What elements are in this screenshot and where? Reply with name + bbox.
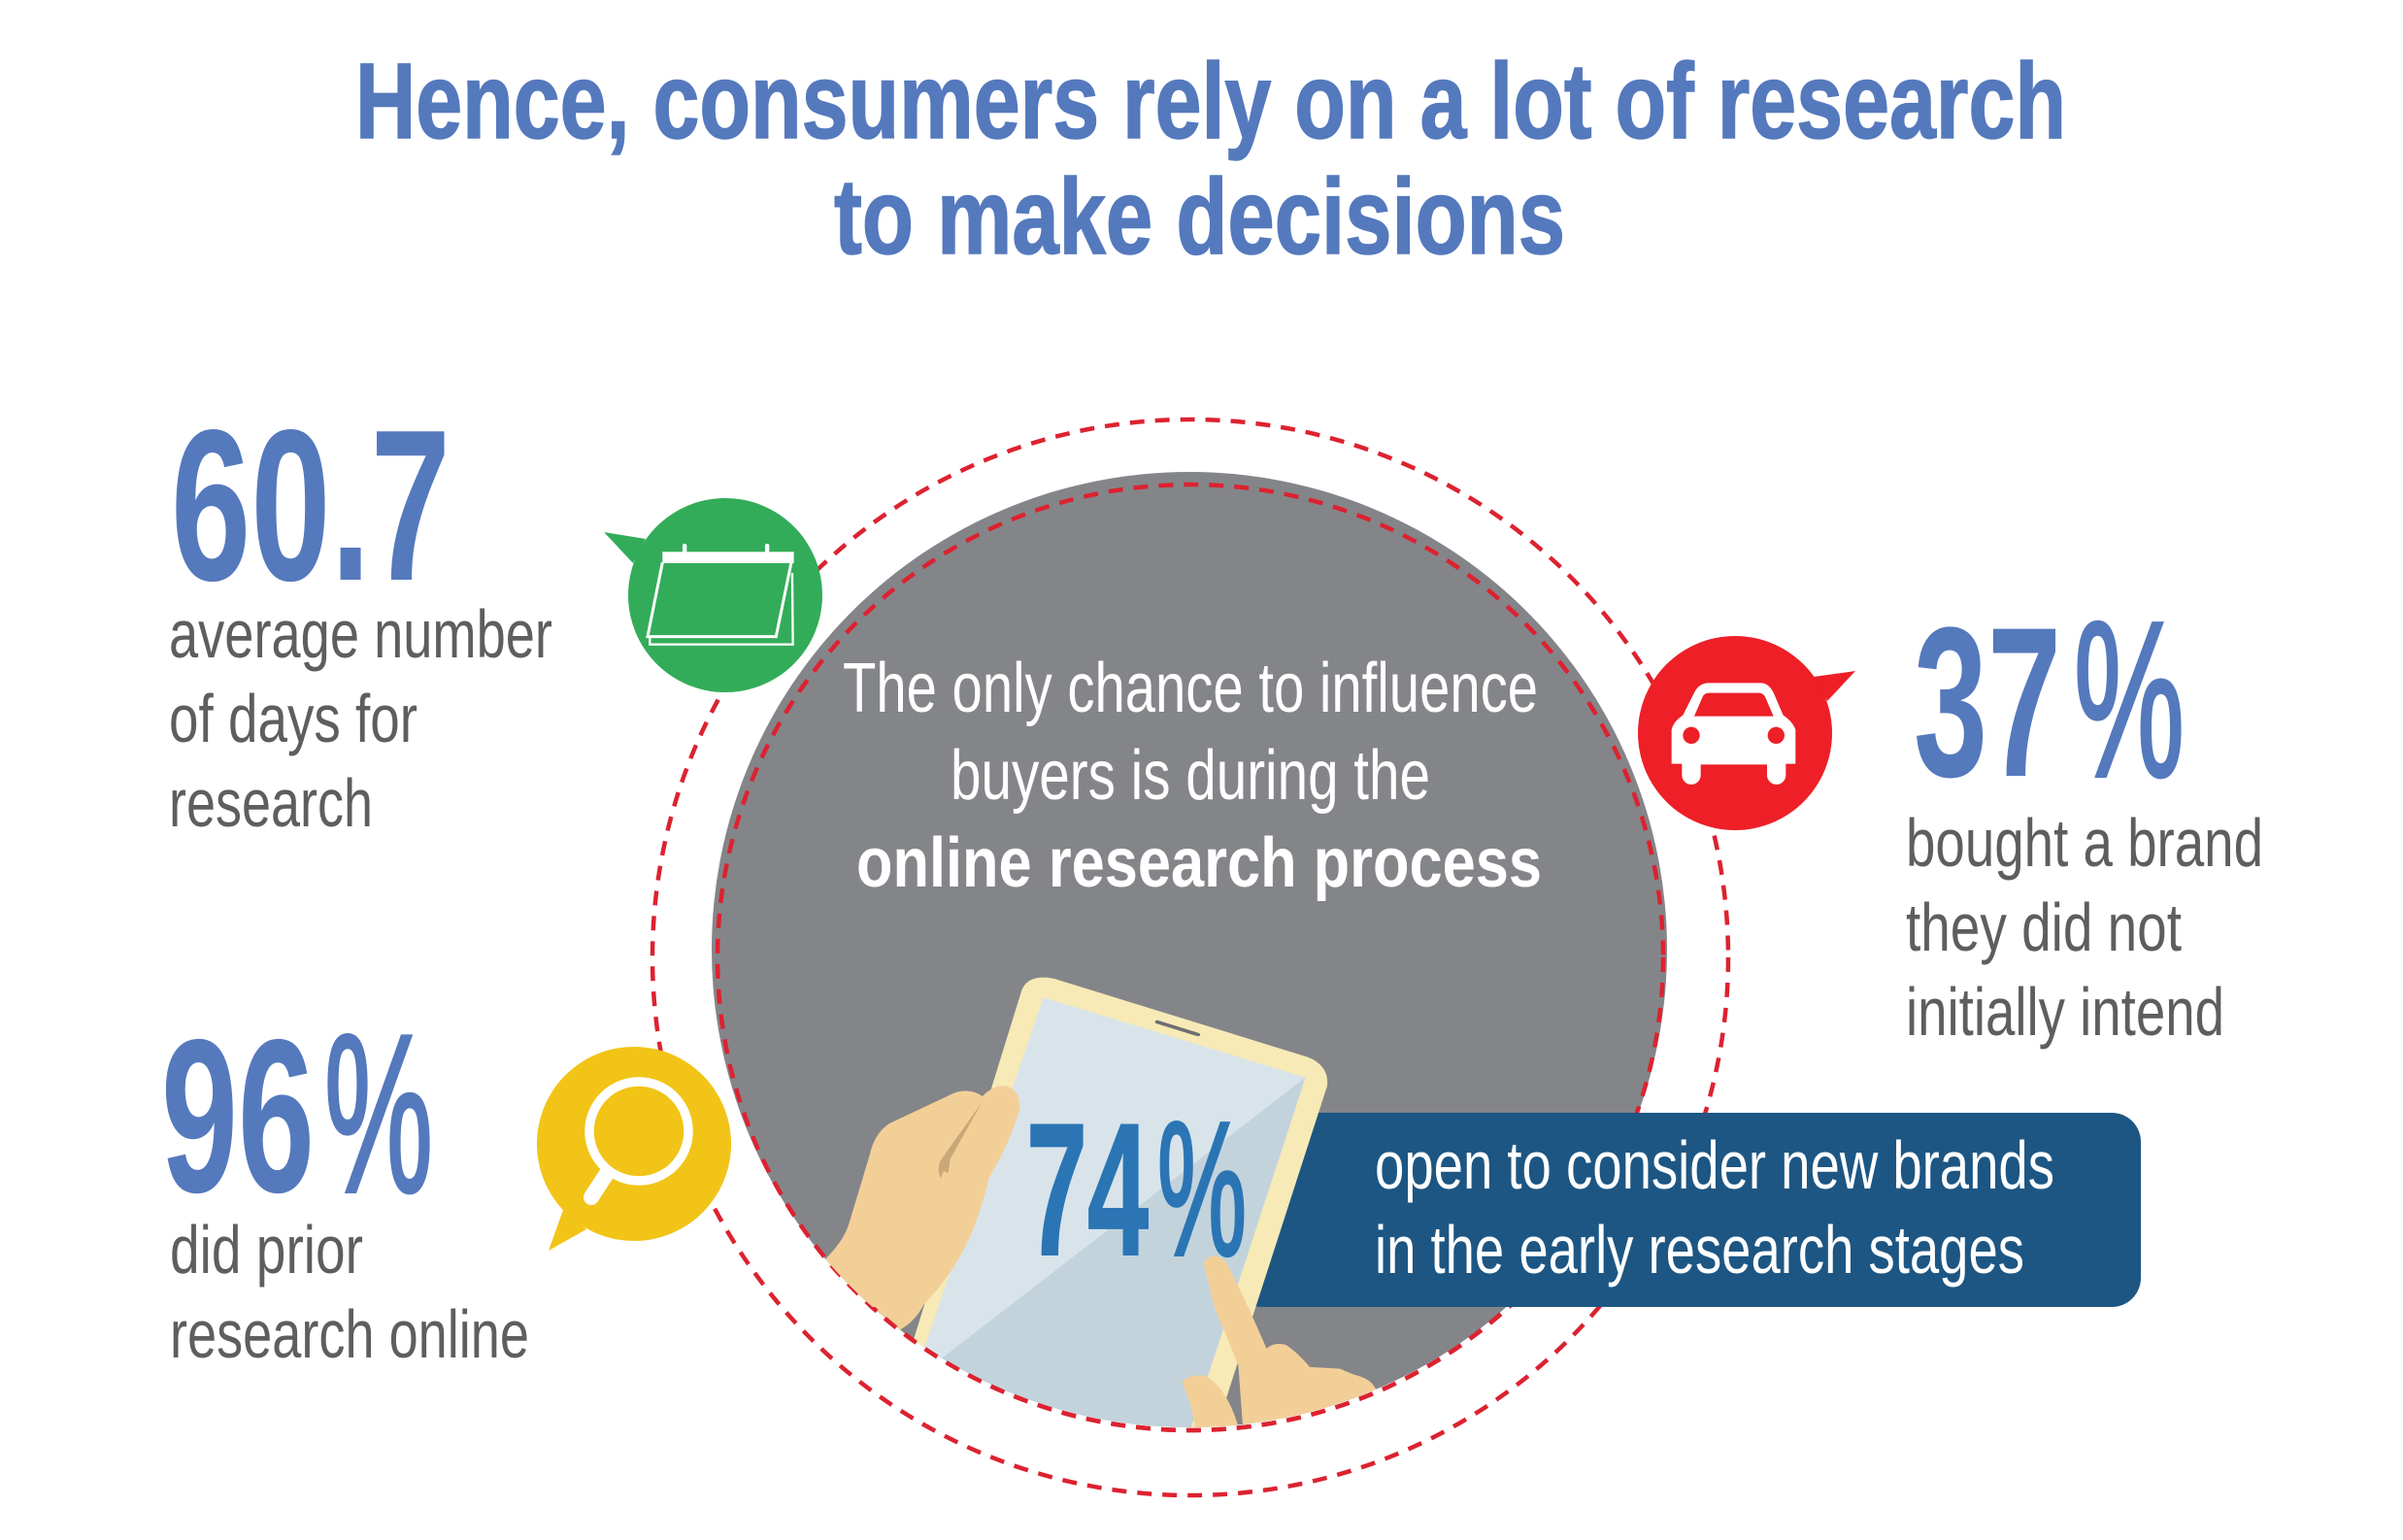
stat: 37 percent: bought a brand: [1906, 805, 2263, 881]
74 percent figure: 74: [1026, 1085, 1149, 1295]
central message: [843, 650, 1542, 902]
title: to make decisions: [834, 157, 1565, 277]
inner dashed ring, lower arc: [868, 1307, 1513, 1433]
icon: calendar bubble: [604, 498, 822, 692]
callout bar: 74 percent: open to consider new brands: [1375, 1127, 2054, 1203]
stat: 37 percent: %: [2074, 577, 2185, 823]
stat: 37 percent: initially intend: [1906, 974, 2224, 1050]
icon: car bubble: [1638, 636, 1855, 830]
central message: online research process: [856, 824, 1542, 902]
left hand: [825, 1086, 1019, 1330]
title: [355, 42, 2066, 277]
stat: 96 percent: did prior: [170, 1212, 363, 1288]
stat: 60.7 days: average number: [169, 596, 552, 672]
icon: magnifier bubble: [537, 1047, 731, 1251]
stat: 96 percent: [161, 988, 529, 1372]
central message: The only chance to influence: [843, 650, 1538, 727]
tablet illustration with hands: [825, 977, 1377, 1427]
stat: 60.7 days: research: [169, 765, 373, 841]
74 percent figure: [1030, 1121, 1245, 1258]
right hand: [1183, 1255, 1377, 1427]
central message: buyers is during the: [951, 737, 1430, 815]
stat: 60.7 days: of days for: [169, 681, 417, 756]
74 percent figure: %: [1157, 1083, 1247, 1295]
stat: 60.7 days: 60.7: [171, 385, 451, 626]
stat: 96 percent: research online: [170, 1296, 529, 1372]
callout bar: 74 percent: in the early research stages: [1375, 1212, 2024, 1288]
stat: 37 percent: 37: [1914, 583, 2061, 821]
outer dashed ring: [652, 419, 1728, 1495]
stat: 37 percent: they did not: [1906, 889, 2182, 965]
stat: 96 percent: %: [324, 988, 433, 1240]
tablet body: [914, 977, 1328, 1427]
stat: 60.7 days: [169, 385, 552, 841]
central grey circle: [712, 472, 1667, 1427]
stat: 96 percent: 96: [161, 993, 315, 1238]
inner dashed ring: [718, 485, 1663, 1430]
stat: 37 percent: [1906, 577, 2263, 1050]
callout bar: 74 percent: [1233, 1113, 2141, 1307]
